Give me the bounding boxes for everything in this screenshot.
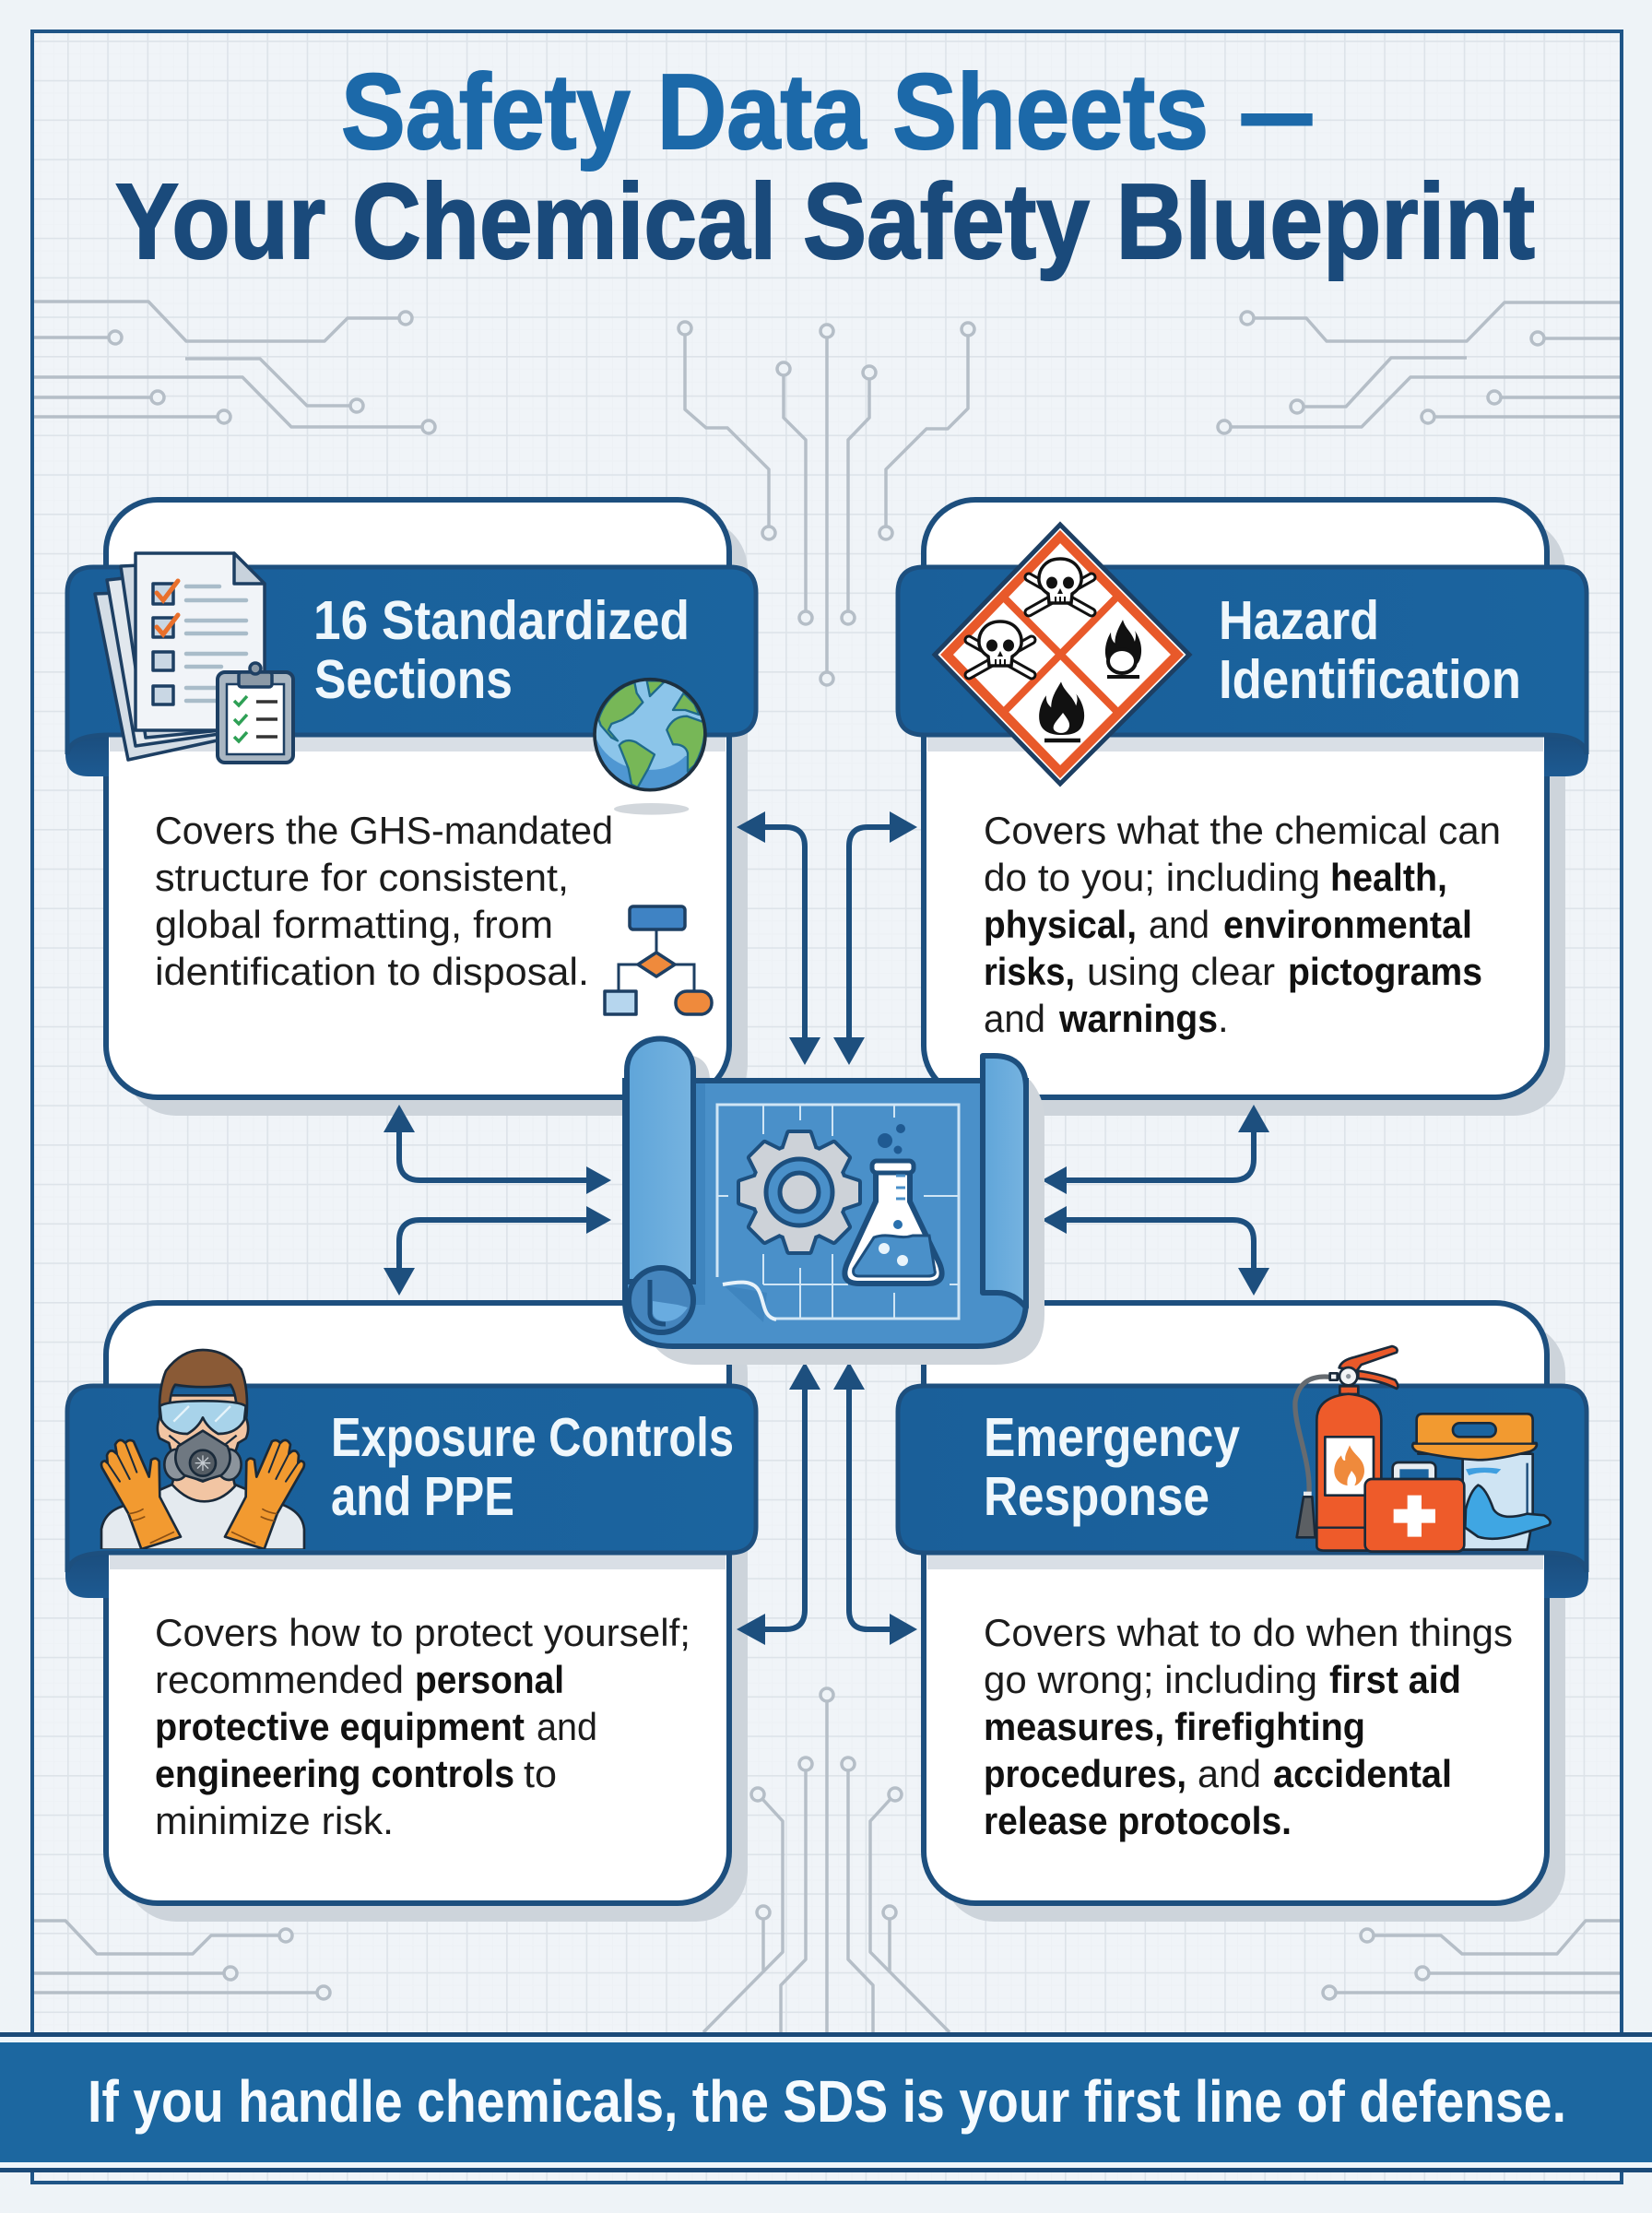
heading [1219, 590, 1521, 710]
arrows: right side [1042, 1105, 1269, 1296]
body text: first aid [1329, 1658, 1461, 1701]
bottom banner [0, 2032, 1652, 2172]
icon: flowchart [605, 906, 712, 1014]
body text: and [537, 1705, 597, 1748]
blueprint drawing grid [717, 1105, 959, 1322]
banner [898, 1386, 1587, 1572]
arrows: left side [384, 1105, 611, 1296]
title: Safety Data Sheets [341, 52, 1209, 172]
body text: health, [1330, 856, 1447, 899]
body text: pictograms [1288, 950, 1482, 993]
panel: hazard identification [898, 500, 1588, 1116]
icon: globe [595, 680, 705, 815]
body text: release protocols. [984, 1799, 1292, 1842]
body text: and [1149, 903, 1210, 946]
body text [155, 1611, 690, 1842]
heading [313, 590, 690, 710]
icon: flask [844, 1124, 942, 1284]
body text: environmental [1223, 903, 1472, 946]
heading: Hazard [1219, 590, 1379, 651]
icon: gear [740, 1133, 858, 1251]
body text: measures, firefighting [984, 1705, 1365, 1748]
icon: fire extinguisher, first aid kit and spill kit [1295, 1346, 1551, 1552]
left roller [627, 1038, 693, 1282]
body text: Covers the GHS-mandated [155, 809, 613, 852]
title: — [1242, 52, 1312, 172]
icon: documents and clipboard [95, 553, 293, 763]
heading: 16 Standardized [313, 590, 690, 651]
circuit traces: top right [1218, 302, 1620, 433]
body text: go wrong; including [984, 1658, 1317, 1701]
central blueprint scroll [625, 1038, 1044, 1365]
body text: and [984, 997, 1045, 1040]
arrows: bottom centre [737, 1362, 917, 1645]
ribbon fold [65, 1542, 109, 1598]
body text: physical, [984, 903, 1137, 946]
ribbon fold [1544, 1542, 1588, 1598]
body text: Covers what the chemical can [984, 809, 1501, 852]
body text [984, 1611, 1513, 1842]
body text: protective equipment [155, 1705, 525, 1748]
heading: Sections [314, 649, 513, 710]
body text: global formatting, from [155, 903, 553, 946]
banner [67, 1386, 756, 1572]
body text: recommended [155, 1658, 404, 1701]
body text: Covers what to do when things [984, 1611, 1513, 1654]
right roller [983, 1056, 1026, 1308]
body text: identification to disposal. [155, 950, 589, 993]
body text [155, 809, 613, 993]
heading [331, 1407, 734, 1527]
body text: minimize risk. [155, 1799, 394, 1842]
body text: and [1198, 1752, 1261, 1795]
banner [898, 567, 1587, 754]
ribbon fold [65, 724, 109, 776]
body text: personal [415, 1658, 564, 1701]
heading: Exposure Controls [331, 1407, 734, 1468]
heading: Identification [1219, 649, 1521, 710]
circuit traces: bottom [34, 1688, 1620, 2032]
arrows: top centre [737, 811, 917, 1065]
ribbon fold [1544, 724, 1588, 776]
body text [984, 809, 1501, 1040]
body text: using clear [1087, 950, 1275, 993]
heading: Response [984, 1466, 1210, 1527]
heading: and PPE [331, 1466, 514, 1527]
panel: exposure controls and PPE [65, 1303, 756, 1922]
circuit traces: top centre [678, 322, 974, 685]
body text: to [524, 1752, 557, 1795]
body text: risks, [984, 950, 1075, 993]
icon: person in PPE [101, 1350, 304, 1550]
heading: Emergency [984, 1407, 1240, 1468]
title [115, 52, 1535, 281]
body text: accidental [1273, 1752, 1452, 1795]
body text: engineering controls [155, 1752, 514, 1795]
body text: Covers how to protect yourself; [155, 1611, 690, 1654]
body text: procedures, [984, 1752, 1186, 1795]
body text: warnings [1058, 997, 1218, 1040]
panel: 16 standardized sections [65, 500, 756, 1116]
body text: structure for consistent, [155, 856, 569, 899]
body text: do to you; including [984, 856, 1320, 899]
heading [984, 1407, 1240, 1527]
circuit traces: top left [34, 302, 435, 433]
banner [67, 567, 756, 754]
panel: emergency response [898, 1303, 1588, 1922]
icon: GHS hazard diamond [935, 525, 1189, 784]
body text: . [1218, 997, 1229, 1040]
